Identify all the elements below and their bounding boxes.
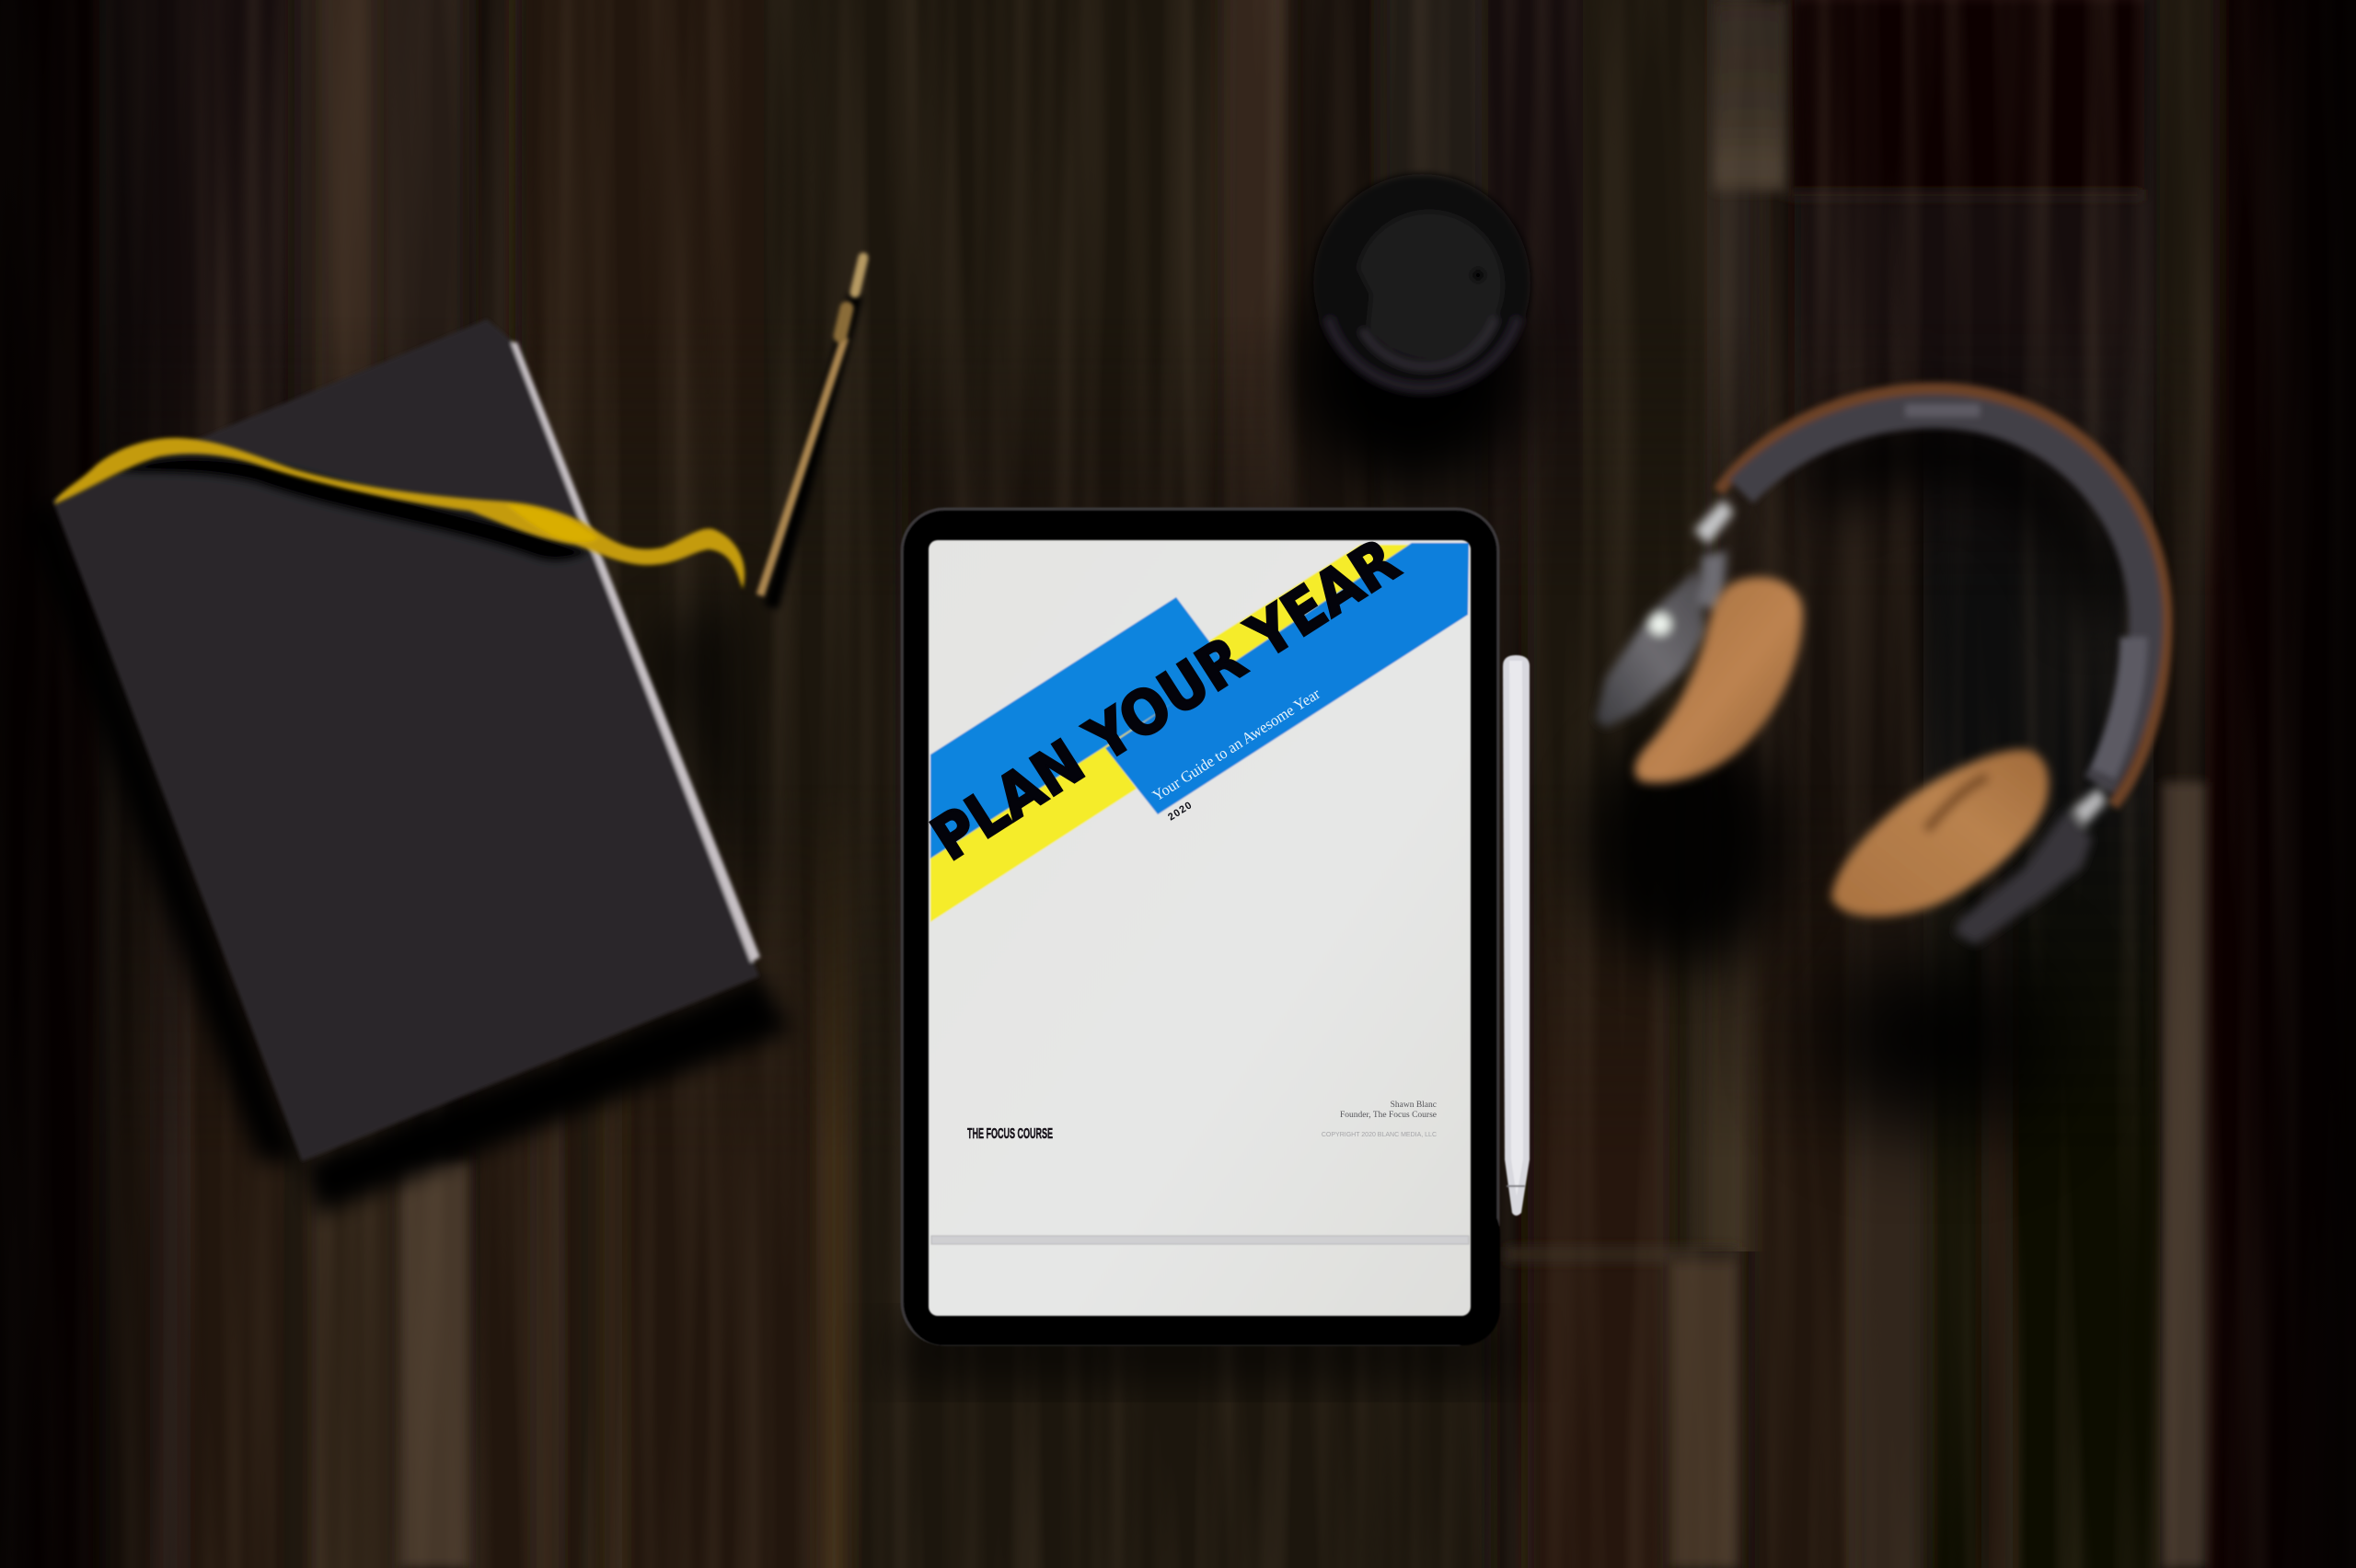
- lower planks: [145, 881, 2154, 1568]
- copyright line: COPYRIGHT 2020 BLANC MEDIA, LLC: [1322, 1132, 1437, 1138]
- headphones: [1595, 388, 2166, 945]
- ribbon shadow: [115, 456, 589, 560]
- author credit: Shawn Blanc: [1391, 1101, 1437, 1110]
- right ear cup: [1831, 749, 2049, 917]
- cover stripe: blue right: [1105, 543, 1469, 814]
- left metal housing: [1595, 500, 1734, 728]
- notebook page edge: [511, 342, 760, 963]
- author credit: [1340, 1101, 1437, 1120]
- cover stripe: yellow: [930, 545, 1412, 922]
- yellow ribbon bookmark: [54, 438, 745, 589]
- apple pencil: [1503, 655, 1530, 1216]
- cover year: 2020: [1166, 800, 1194, 824]
- headband: [1718, 388, 2166, 806]
- pen shadow: [771, 294, 856, 607]
- left ear cup: [1634, 577, 1803, 783]
- brand wordmark: THE FOCUS COURSE: [967, 1126, 1053, 1142]
- cover stripe: blue left: [930, 597, 1229, 859]
- top planks: [294, 0, 2224, 506]
- coffee tumbler: [1313, 174, 1530, 391]
- cover title: PLAN YOUR YEAR: [919, 525, 1411, 874]
- author credit: Founder, The Focus Course: [1340, 1111, 1437, 1120]
- bright plank pieces: [1714, 0, 1785, 191]
- cover subtitle: Your Guide to an Awesome Year: [1149, 685, 1323, 804]
- notebook: [52, 319, 760, 1161]
- tablet: [902, 509, 1500, 1345]
- gold pen: [760, 258, 863, 607]
- shadows beneath objects: [23, 253, 2117, 1380]
- tumbler lid: [1356, 212, 1503, 359]
- status bar strip: [931, 1236, 1469, 1244]
- tablet screen: [929, 540, 1471, 1316]
- right metal housing: [1955, 787, 2107, 945]
- tablet body: [902, 509, 1500, 1345]
